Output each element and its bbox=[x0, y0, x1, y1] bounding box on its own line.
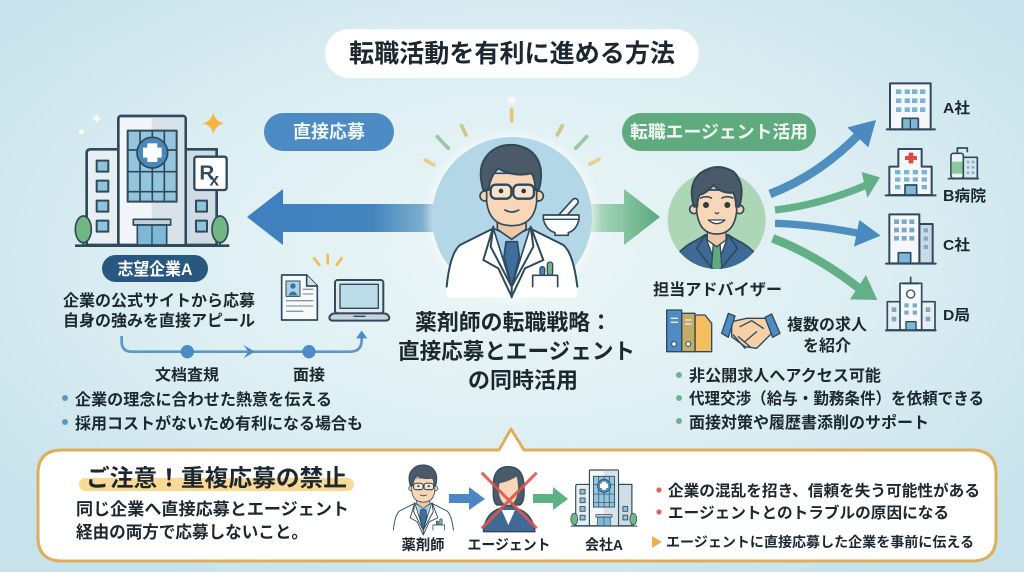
list: risks: 企業の混乱を招き、信頼を失う可能性がある bbox=[668, 481, 980, 500]
heading: central strategy bbox=[398, 310, 635, 393]
text: multiple job offers bbox=[787, 315, 867, 355]
heading: warning: ご注意！重複応募の禁止 bbox=[86, 464, 347, 491]
step labels bbox=[155, 365, 325, 384]
step labels: 文档査規 bbox=[155, 365, 220, 384]
label: bureau D: D局 bbox=[943, 307, 970, 324]
text: warning description: 経由の両方で応募しないこと。 bbox=[76, 522, 308, 542]
icon: binders bbox=[667, 310, 712, 352]
icon: laptop bbox=[329, 280, 389, 321]
heading: central strategy: の同時活用 bbox=[468, 368, 578, 393]
title bbox=[325, 29, 699, 78]
arrow: blue mini bbox=[449, 487, 485, 510]
icon: bureau D bbox=[886, 277, 936, 330]
illustration: pharmacist bbox=[422, 127, 602, 307]
icon: sparkles bbox=[79, 113, 224, 134]
icon: resume document bbox=[282, 275, 317, 320]
list: risks: エージェントとのトラブルの原因になる bbox=[668, 503, 949, 522]
icon: company A bbox=[887, 83, 935, 129]
arrow: to agent bbox=[590, 189, 660, 245]
icon: Rx sign: R bbox=[199, 161, 214, 184]
list: direct application benefits: 企業の理念に合わせた熱意を伝える bbox=[75, 390, 332, 409]
text: multiple job offers: 複数の求人 bbox=[787, 315, 867, 334]
icon: mini pharmacist bbox=[393, 465, 453, 535]
label: company A: A社 bbox=[943, 100, 970, 117]
list: agent benefits: 代理交渉（給与・勤務条件）を依頼できる bbox=[689, 389, 984, 408]
arrow: green mini bbox=[533, 487, 568, 510]
label: direct application: 直接応募 bbox=[293, 122, 365, 142]
text: direct application description bbox=[63, 291, 255, 330]
icon: target company building bbox=[75, 113, 229, 246]
heading: central strategy: 直接応募とエージェント bbox=[398, 339, 635, 364]
icon: mini company building bbox=[571, 470, 637, 526]
icon: Rx sign bbox=[194, 157, 227, 190]
arrow: to direct application bbox=[247, 189, 445, 245]
icon: radiating idea rays bbox=[425, 94, 599, 165]
icon: crossed out agent bbox=[482, 467, 537, 532]
label: direct application bbox=[264, 113, 394, 151]
badge: target company A bbox=[102, 255, 208, 282]
text: direct application description: 自身の強みを直接アピール bbox=[63, 311, 255, 330]
list: agent benefits bbox=[676, 366, 984, 432]
labels: flow actors: 薬剤師 bbox=[402, 537, 444, 554]
icon: company C bbox=[886, 214, 936, 264]
text: direct application description: 企業の公式サイトから応募 bbox=[63, 291, 255, 310]
panel: warning bbox=[38, 429, 996, 561]
list: direct application benefits bbox=[62, 390, 363, 433]
label: hospital B: B病院 bbox=[943, 187, 986, 205]
text: warning description bbox=[76, 499, 349, 542]
heading: central strategy: 薬剤師の転職戦略： bbox=[415, 310, 612, 335]
step labels: 面接 bbox=[293, 366, 325, 384]
labels: flow actors bbox=[402, 537, 623, 554]
label: agent use: 転職エージェント活用 bbox=[630, 122, 808, 142]
illustration: advisor bbox=[668, 167, 766, 270]
icon: handshake bbox=[722, 313, 780, 348]
labels: flow actors: エージェント bbox=[468, 538, 550, 554]
tip: tell agent beforehand: エージェントに直接応募した企業を事前に伝える bbox=[666, 534, 974, 550]
list: agent benefits: 非公開求人へアクセス可能 bbox=[689, 366, 881, 385]
icon: mortar and pestle bbox=[543, 202, 579, 235]
flow: application process bbox=[122, 331, 367, 358]
text: warning description: 同じ企業へ直接応募とエージェント bbox=[76, 499, 349, 519]
list: agent benefits: 面接対策や履歴書添削のサポート bbox=[689, 413, 929, 432]
list: direct application benefits: 採用コストがないため有利になる場合も bbox=[75, 414, 363, 433]
title: 転職活動を有利に進める方法 bbox=[349, 40, 675, 68]
icon: Rx sign: x bbox=[209, 170, 219, 190]
label: agent use bbox=[622, 113, 816, 151]
label: advisor: 担当アドバイザー bbox=[653, 281, 782, 299]
icon: hospital B bbox=[886, 149, 936, 195]
icon: pharmacy bottle and building bbox=[948, 148, 978, 179]
text: multiple job offers: を紹介 bbox=[803, 337, 851, 355]
label: company C: C社 bbox=[943, 237, 970, 254]
arrows: to multiple employers bbox=[770, 120, 881, 300]
list: risks bbox=[656, 481, 980, 522]
badge: target company A: 志望企業A bbox=[118, 259, 192, 279]
icon: attention rays bbox=[314, 255, 342, 265]
labels: flow actors: 会社A bbox=[585, 537, 623, 554]
